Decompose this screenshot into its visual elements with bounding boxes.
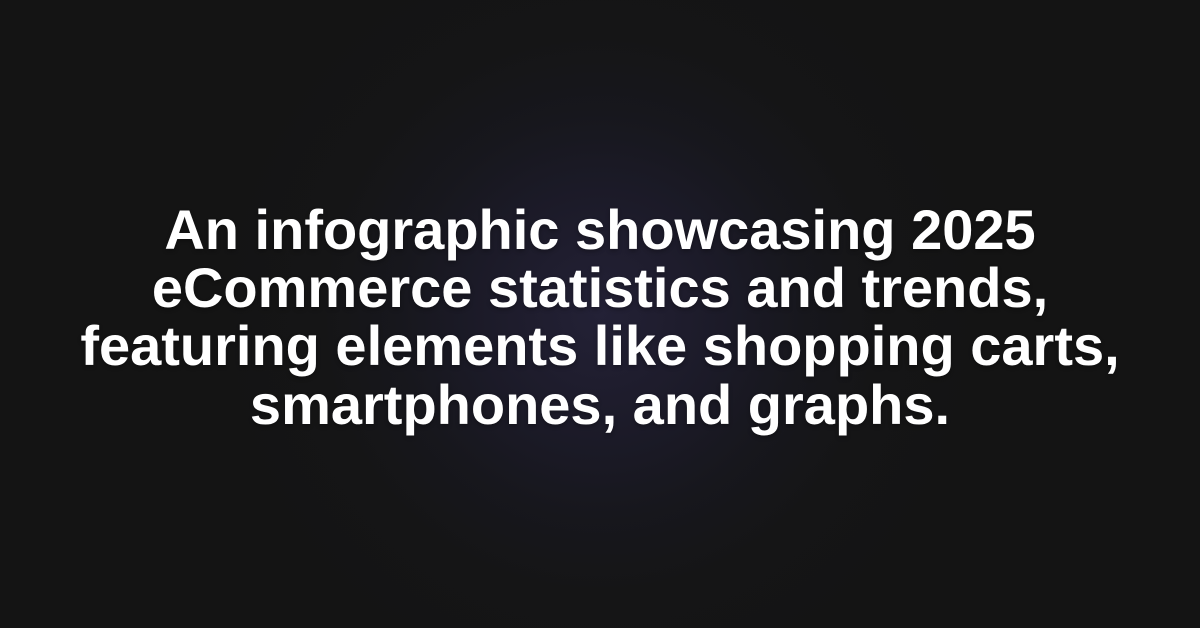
title: featuring elements like shopping carts,: [80, 314, 1120, 377]
title: An infographic showcasing 2025: [164, 198, 1036, 261]
title: smartphones, and graphs.: [250, 373, 950, 436]
title: [80, 198, 1120, 436]
title: eCommerce statistics and trends,: [152, 256, 1048, 319]
